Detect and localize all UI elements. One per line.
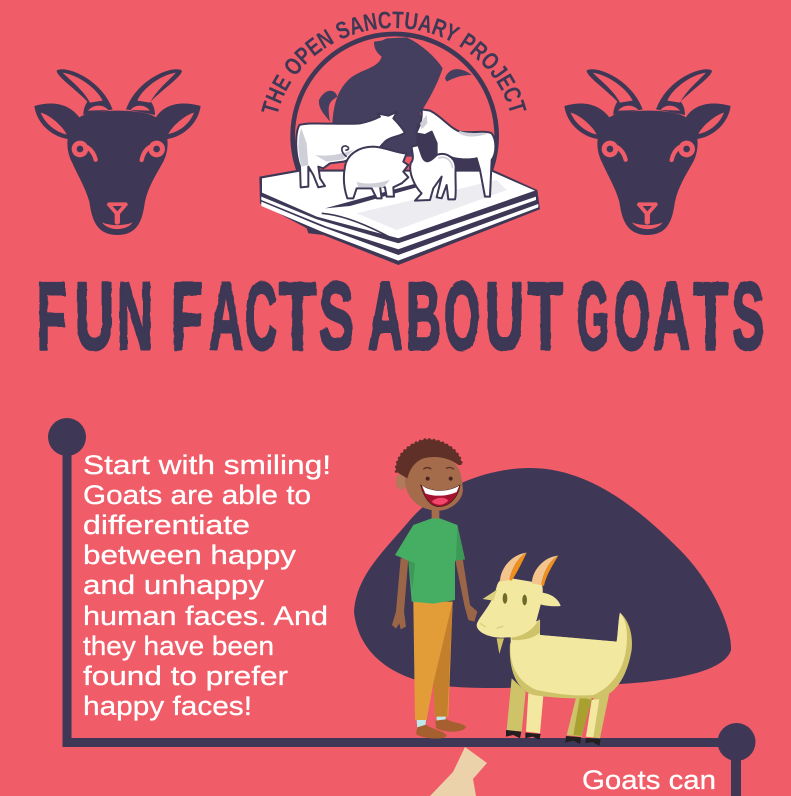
rooster (410, 145, 456, 201)
text block: smiling fact: between happy (83, 540, 297, 570)
text block: smiling fact: and unhappy (83, 570, 265, 600)
text block: smiling fact: happy faces! (83, 691, 252, 721)
book (259, 169, 540, 265)
text block: smiling fact: they have been (83, 631, 274, 661)
timeline connector (48, 418, 756, 796)
title: T (693, 263, 728, 370)
logo artwork (259, 34, 540, 265)
title: U (485, 263, 524, 370)
illustration: smiling boy (392, 439, 477, 739)
horse (416, 109, 495, 197)
title: A (209, 263, 243, 370)
text block: smiling fact: Goats are able to (83, 480, 311, 510)
title: A (653, 263, 690, 370)
text block: next fact start: Goats can (582, 765, 716, 795)
icon: goat head right (564, 69, 731, 235)
title: U (75, 263, 114, 370)
title: S (319, 263, 354, 370)
text block: smiling fact: found to prefer (83, 661, 288, 691)
cropped hand of next section (430, 747, 487, 796)
title: A (368, 263, 403, 370)
title: N (117, 263, 153, 370)
icon: goat head left (34, 69, 201, 235)
blob behind illustration (354, 468, 731, 688)
title: T (528, 263, 563, 370)
text block: smiling fact: Start with smiling! (83, 450, 331, 480)
title: G (577, 263, 609, 370)
title: F (37, 263, 66, 370)
title: T (279, 263, 316, 370)
title: O (614, 263, 650, 370)
title: B (406, 263, 441, 370)
text block: smiling fact: human faces. And (83, 601, 328, 631)
title: O (444, 263, 480, 370)
text block: smiling fact: differentiate (83, 510, 250, 540)
pig (342, 146, 348, 157)
illustration: goat (477, 553, 632, 746)
title: F (171, 263, 203, 370)
text block: smiling fact (83, 450, 331, 721)
logo curved name: THE OPEN SANCTUARY PROJECT (261, 12, 527, 112)
logo: The Open Sanctuary Project (259, 12, 540, 265)
title (37, 263, 764, 370)
animals (296, 109, 495, 201)
cow (296, 112, 405, 187)
title: C (245, 263, 277, 370)
